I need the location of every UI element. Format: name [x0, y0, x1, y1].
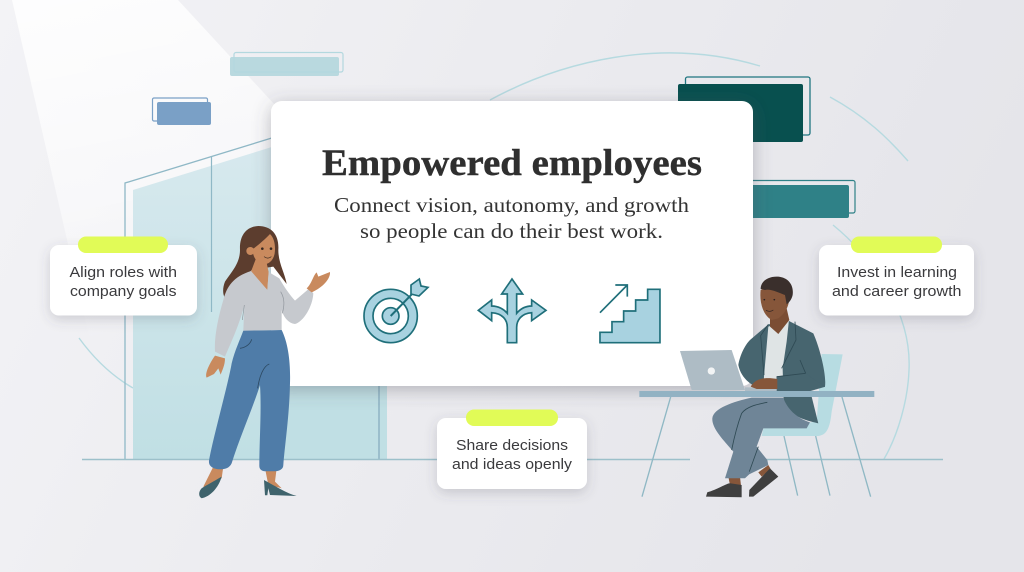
floating rectangle: dark teal	[678, 77, 810, 142]
trouser creases	[240, 339, 269, 388]
blouse folds	[242, 292, 284, 320]
jacket	[738, 321, 825, 423]
hair	[223, 226, 287, 299]
subtitle	[334, 193, 689, 243]
icon: target	[364, 279, 428, 343]
floating rectangle: light teal	[230, 52, 343, 76]
callout: share decisions: Share decisions	[456, 438, 568, 454]
callout: learning: and career growth	[832, 284, 962, 300]
face details	[261, 248, 272, 258]
trouser creases	[732, 402, 767, 472]
shirt	[763, 320, 789, 391]
callout: learning: Invest in learning	[837, 265, 957, 281]
jacket sleeve	[777, 373, 825, 391]
floating rectangle: mid teal	[740, 180, 855, 218]
title: Empowered employees	[322, 143, 702, 184]
legs and shoes	[199, 467, 297, 498]
man at desk	[639, 277, 874, 497]
callout: align roles: company goals	[70, 284, 176, 300]
building window	[125, 137, 387, 459]
trousers	[209, 330, 290, 471]
callout: share decisions	[437, 410, 587, 489]
callout: align roles: Align roles with	[70, 265, 177, 281]
icon: stairs with arrow	[600, 285, 660, 343]
icon: branching arrows	[478, 279, 546, 343]
icon row	[364, 279, 660, 343]
trousers	[712, 398, 810, 478]
floating rectangle: blue	[152, 98, 211, 125]
subtitle: Connect vision, autonomy, and growth	[334, 193, 689, 217]
woman presenting	[199, 226, 330, 498]
laptop	[680, 350, 777, 391]
shoes	[706, 465, 778, 497]
callout: share decisions: and ideas openly	[452, 457, 573, 473]
hand	[751, 378, 777, 389]
callout: learning	[819, 236, 974, 316]
main card	[271, 101, 753, 386]
blouse	[215, 271, 313, 357]
neck and face	[246, 234, 275, 290]
decorative arcs	[79, 53, 909, 459]
chair	[762, 354, 843, 496]
desk	[639, 391, 874, 497]
hands	[206, 272, 330, 378]
callout: align roles	[50, 236, 197, 316]
light beam	[12, 0, 275, 340]
jacket lapels	[761, 322, 806, 375]
neck and head	[760, 277, 793, 334]
floor line	[82, 458, 943, 460]
subtitle: so people can do their best work.	[360, 219, 663, 243]
